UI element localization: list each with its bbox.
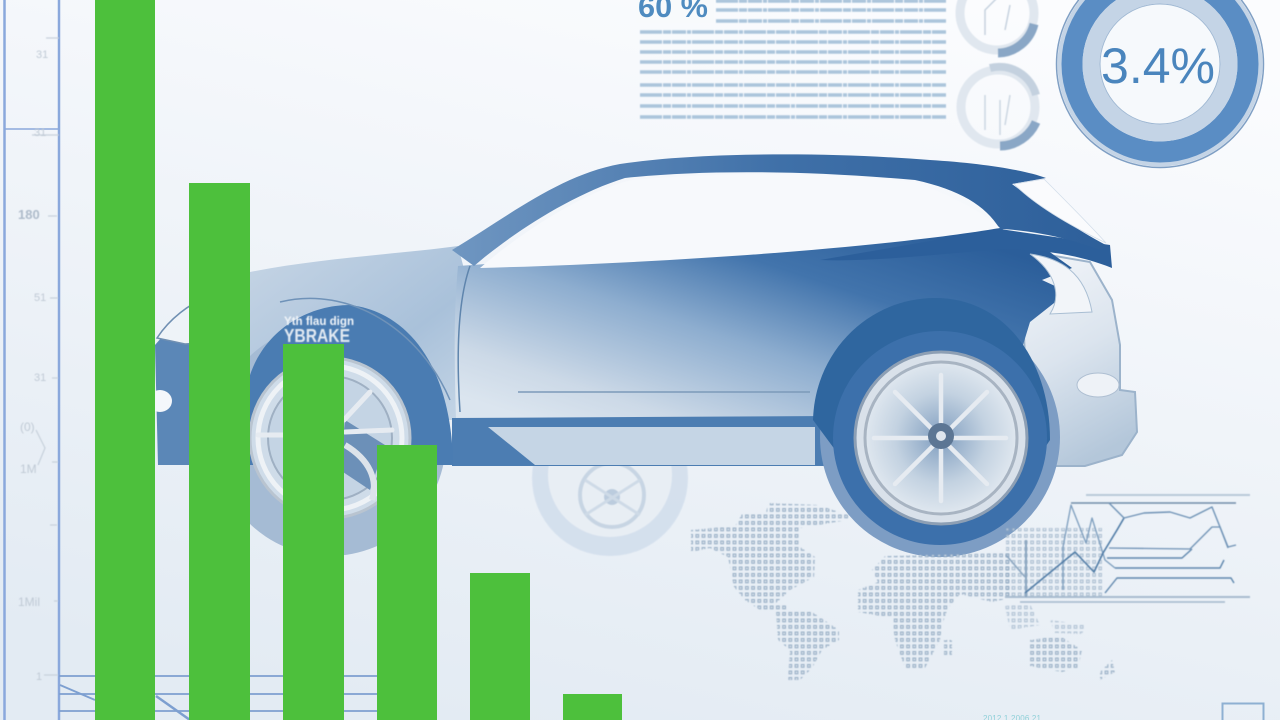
bar 2 bbox=[189, 183, 250, 720]
y-axis tick labels: (0) bbox=[20, 420, 35, 434]
rear side lamp bbox=[1077, 373, 1119, 397]
y-axis tick labels: 31 bbox=[34, 127, 46, 139]
small square outline bbox=[1222, 704, 1264, 720]
green bar chart bbox=[95, 0, 622, 720]
bar 1 bbox=[95, 0, 155, 720]
y-axis tick labels: 180 bbox=[18, 207, 40, 222]
door seam bbox=[458, 266, 470, 412]
line chart panel bbox=[1005, 495, 1250, 602]
bar 5 bbox=[470, 573, 530, 720]
badge text on front tyre bbox=[284, 314, 354, 346]
front bumper and nose bbox=[155, 300, 260, 465]
rear quarter glass bbox=[1014, 179, 1106, 243]
y-axis tick labels: 51 bbox=[34, 292, 46, 304]
rear bumper bbox=[1020, 250, 1137, 466]
donut value: 3.4% bbox=[1101, 38, 1215, 94]
bar 3 bbox=[283, 344, 344, 720]
y-axis tick labels: 31 bbox=[36, 49, 48, 61]
badge text on front tyre: Yth flau dign bbox=[284, 314, 354, 328]
y-axis tick labels: 1M bbox=[20, 462, 37, 476]
window glass bbox=[480, 174, 1000, 268]
body text block bbox=[640, 1, 947, 117]
tail light bbox=[1030, 254, 1092, 314]
badge text on front tyre: YBRAKE bbox=[284, 326, 350, 346]
world dot map bbox=[691, 503, 1115, 680]
grid lines at chart base bbox=[59, 676, 378, 720]
bar 6 bbox=[563, 694, 622, 720]
small donut bottom bbox=[961, 67, 1036, 146]
y-axis tick labels: 31 bbox=[34, 372, 46, 384]
left axes bbox=[4, 0, 59, 720]
fog lamp bbox=[148, 390, 172, 412]
y-axis tick labels bbox=[18, 38, 59, 683]
main body side bbox=[455, 228, 1072, 420]
car illustration bbox=[148, 154, 1137, 557]
main donut gauge bbox=[1056, 0, 1264, 168]
hood bbox=[250, 246, 480, 420]
ghost wheel reflection bbox=[532, 400, 688, 556]
front wheel arch and tyre bbox=[214, 298, 453, 556]
rear wheel arch and tyre bbox=[813, 298, 1060, 557]
lower sill band bbox=[452, 416, 830, 466]
y-axis tick labels: 1Mil bbox=[18, 595, 40, 609]
small donut top bbox=[960, 0, 1034, 53]
dark shoulder band bbox=[820, 229, 1112, 268]
roof line bbox=[452, 154, 1110, 266]
y-axis tick labels: 1 bbox=[36, 671, 42, 683]
bar 4 bbox=[377, 445, 437, 720]
